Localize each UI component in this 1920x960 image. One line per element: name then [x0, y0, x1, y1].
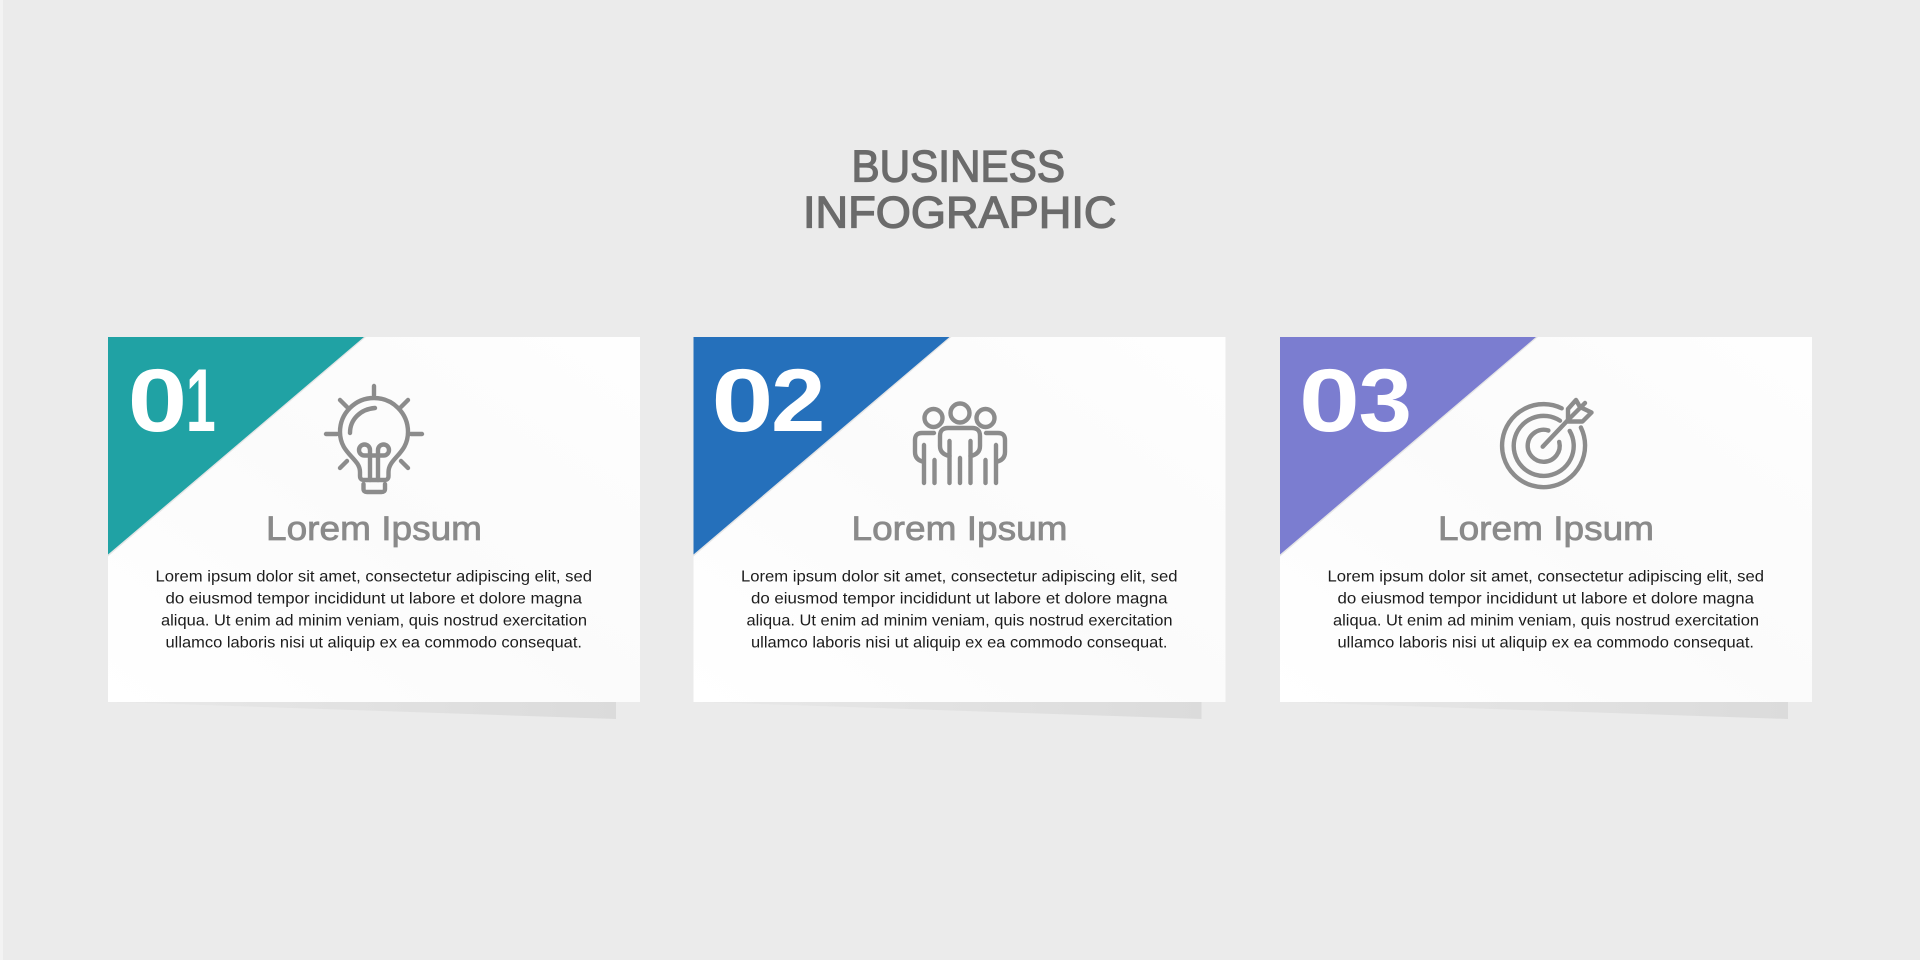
card 03 body text: ullamco laboris nisi ut aliquip ex ea commodo consequat. — [1338, 634, 1754, 652]
card 03 body text: aliqua. Ut enim ad minim veniam, quis nostrud exercitation — [1333, 612, 1759, 630]
card 03 number: 3 — [1358, 350, 1412, 450]
card 02 number: 2 — [771, 350, 825, 450]
card 01 number — [128, 350, 216, 450]
card 02 body text: Lorem ipsum dolor sit amet, consectetur adipiscing elit, sed — [741, 568, 1178, 586]
card 01 heading: Lorem Ipsum — [266, 510, 482, 548]
title: BUSINESS — [852, 142, 1065, 192]
card 01 corner triangle — [108, 337, 366, 556]
card 01 body text: Lorem ipsum dolor sit amet, consectetur adipiscing elit, sed — [156, 568, 592, 586]
card 03 body text: do eiusmod tempor incididunt ut labore et dolore magna — [1338, 590, 1754, 608]
icon: light bulb — [326, 386, 422, 492]
card 02 number — [712, 350, 825, 450]
panel: card 01 — [108, 337, 640, 719]
card 02 number: 0 — [712, 351, 773, 450]
card 03 number — [1299, 350, 1412, 451]
card 03 heading: Lorem Ipsum — [1438, 510, 1654, 548]
card 02 background — [694, 337, 1226, 702]
card 02 corner triangle — [694, 337, 952, 556]
card 03 body text — [1328, 568, 1764, 652]
card 01 body text: aliqua. Ut enim ad minim veniam, quis nostrud exercitation — [161, 612, 587, 630]
title: INFOGRAPHIC — [803, 188, 1116, 238]
icon: target with arrow — [1502, 400, 1592, 487]
card 01 shadow — [115, 702, 616, 719]
card 03 shadow — [1287, 702, 1788, 719]
card 01 body text: ullamco laboris nisi ut aliquip ex ea commodo consequat. — [166, 634, 582, 652]
card 02 body text: aliqua. Ut enim ad minim veniam, quis nostrud exercitation — [746, 612, 1172, 630]
card 01 body text: do eiusmod tempor incididunt ut labore et dolore magna — [166, 590, 582, 608]
card 03 number: 0 — [1299, 352, 1360, 451]
card 02 shadow — [700, 702, 1202, 719]
card 01 body text — [156, 568, 592, 652]
title — [803, 142, 1116, 238]
panel: card 02 — [694, 337, 1226, 719]
icon: team of people — [915, 404, 1005, 483]
card 01 number: 0 — [128, 350, 187, 450]
card 03 body text: Lorem ipsum dolor sit amet, consectetur adipiscing elit, sed — [1328, 568, 1764, 586]
card 03 corner triangle — [1280, 337, 1538, 556]
card 02 body text — [741, 568, 1178, 652]
card 01 background — [108, 337, 640, 702]
card 01 number: 1 — [186, 351, 216, 450]
card 02 body text: do eiusmod tempor incididunt ut labore et dolore magna — [751, 590, 1168, 608]
card 02 heading: Lorem Ipsum — [852, 510, 1068, 548]
card 02 body text: ullamco laboris nisi ut aliquip ex ea commodo consequat. — [751, 634, 1168, 652]
panel: card 03 — [1280, 337, 1812, 719]
card 03 background — [1280, 337, 1812, 702]
